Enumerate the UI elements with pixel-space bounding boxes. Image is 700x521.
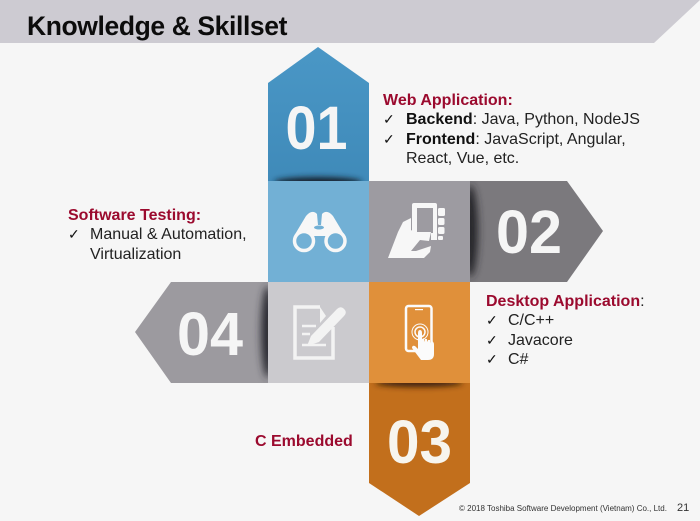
text: desktop application: Javacore [508,332,573,348]
arrow 02 [462,181,603,282]
icon: binoculars [294,212,345,250]
square: light grey [268,282,369,383]
square: orange [369,282,470,383]
icon: document and pencil [295,307,346,358]
square: grey [369,181,470,282]
text: desktop application: Desktop Application: [486,293,645,310]
icon: phone with touch [406,306,434,360]
arrow 04: 04 [177,300,243,368]
title bar [0,0,700,43]
text: desktop application: C# [508,351,528,368]
footer copyright: © 2018 Toshiba Software Development (Vietnam) Co., Ltd. [459,504,667,513]
text: c embedded: C Embedded [255,433,353,450]
text: software testing: Software Testing: [68,207,201,224]
text: desktop application [486,293,645,368]
text: software testing [68,207,247,262]
text: desktop application: ✓ [486,332,498,348]
text: web application: Web Application: [383,92,513,109]
text: desktop application: C/C++ [508,312,554,329]
arrow 03: 03 [387,408,452,476]
arrow 01 [268,47,369,187]
title: Knowledge & Skillset [27,11,287,41]
text: web application: React, Vue, etc. [406,150,519,167]
text: software testing: Virtualization [90,246,181,262]
text: desktop application: ✓ [486,312,498,328]
text: web application [383,92,640,167]
text: desktop application: ✓ [486,351,498,367]
text: web application: ✓ [383,111,395,127]
text: software testing: Manual & Automation, [90,226,247,243]
text: software testing: ✓ [68,226,80,242]
text: web application: Frontend: JavaScript, Angular, [406,130,626,148]
text: web application: ✓ [383,130,395,146]
icon: hand holding phone [388,203,445,258]
arrow 04 [135,282,275,383]
arrow 01: 01 [286,94,348,162]
arrow 03 [369,379,470,516]
arrow 02: 02 [496,198,562,266]
text: web application: Backend: Java, Python, NodeJS [406,111,640,128]
page number: 21 [677,502,689,514]
square: blue [268,181,369,282]
